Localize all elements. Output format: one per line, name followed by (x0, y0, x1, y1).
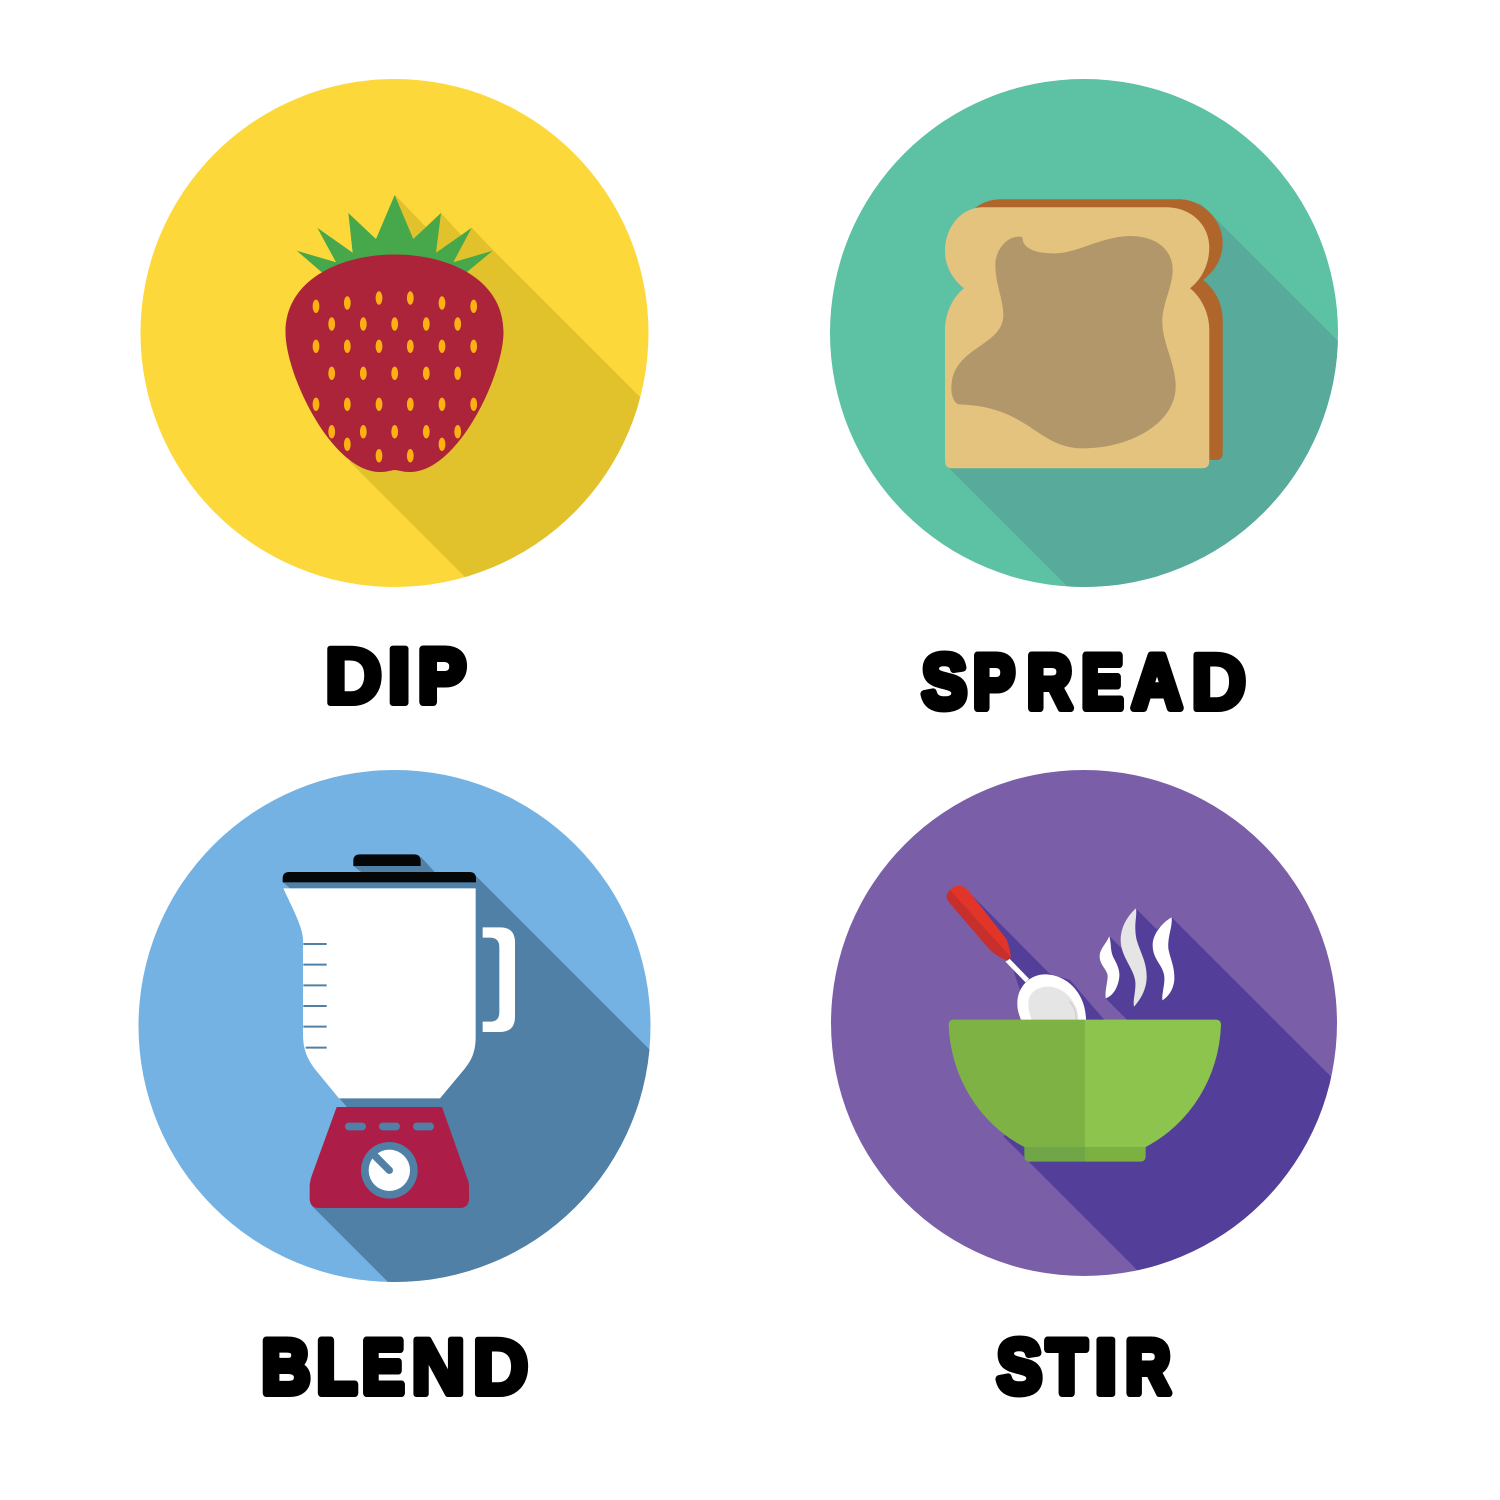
teal circle (830, 79, 1338, 587)
blender lid (283, 854, 476, 888)
heading: SPREAD: S (922, 640, 967, 725)
heading: SPREAD: E (1082, 640, 1123, 725)
heading: SPREAD: D (1191, 638, 1246, 726)
icon: strawberry (286, 195, 504, 472)
heading: BLEND: D (473, 1323, 528, 1411)
panel: dip (140, 79, 648, 587)
long shadow: toast (945, 203, 1338, 587)
heading: DIP: I (387, 632, 411, 720)
heading: SPREAD: P (973, 640, 1015, 725)
jug handle (483, 927, 515, 1032)
blue circle (138, 770, 650, 1282)
heading: SPREAD: A (1132, 640, 1182, 725)
heading: DIP: P (418, 634, 466, 719)
icon: steam (1100, 908, 1174, 1007)
panel: blend (138, 770, 650, 1282)
blender base (310, 1107, 469, 1208)
heading: DIP: D (325, 632, 382, 720)
heading: STIR: S (997, 1325, 1042, 1410)
heading: BLEND: N (411, 1323, 466, 1411)
panel: spread (830, 79, 1338, 587)
panel: stir (831, 770, 1337, 1276)
heading: STIR: I (1094, 1323, 1118, 1411)
icon: blender (283, 854, 515, 1208)
icon: toast with spread (945, 199, 1223, 468)
purple circle (831, 770, 1337, 1276)
base buttons (345, 1123, 434, 1130)
long shadow: blender (312, 876, 650, 1282)
long shadow: strawberry (350, 195, 640, 577)
heading: SPREAD: R (1027, 640, 1072, 725)
icon: green bowl (949, 1020, 1221, 1162)
heading: BLEND: B (262, 1325, 310, 1410)
heading: BLEND: E (362, 1325, 404, 1410)
yellow circle (140, 79, 648, 587)
dial (361, 1142, 418, 1199)
measuring ticks (303, 944, 327, 1048)
heading: BLEND: L (317, 1325, 357, 1410)
heading: STIR: T (1047, 1325, 1087, 1410)
icon: spoon (947, 886, 1086, 1020)
long shadows: spoon, steam and bowl (972, 896, 1332, 1270)
heading: STIR: R (1126, 1325, 1170, 1410)
blender jug (283, 888, 476, 1098)
